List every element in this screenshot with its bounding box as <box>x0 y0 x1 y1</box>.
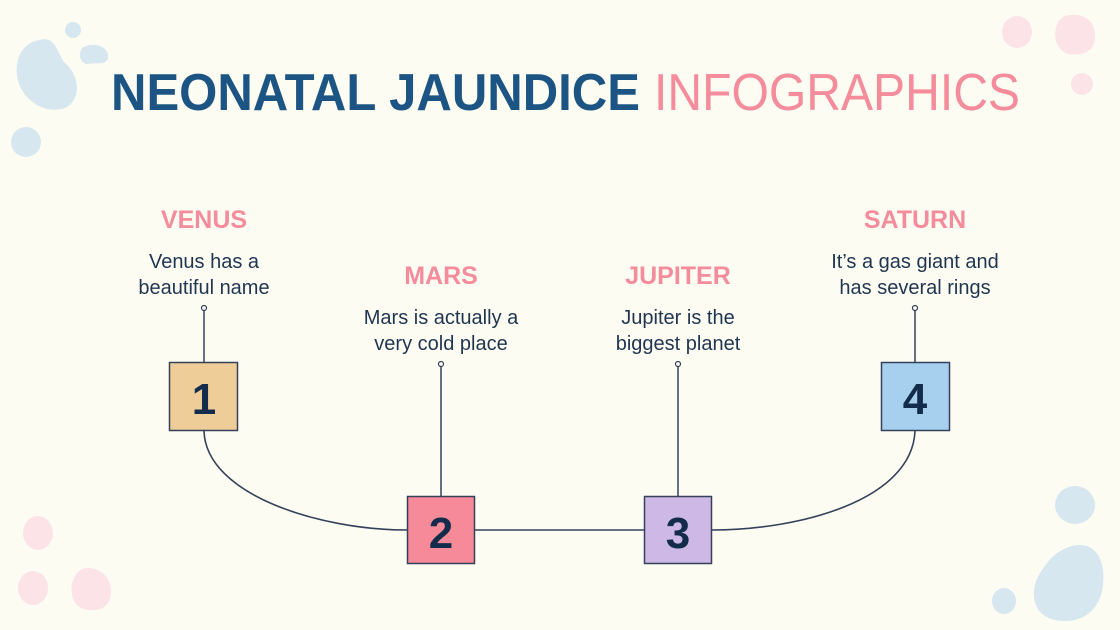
title: NEONATAL JAUNDICE <box>111 64 640 122</box>
step 4: Saturn: It’s a gas giant and <box>831 251 999 273</box>
step 2: Mars: very cold place <box>374 333 508 355</box>
step 4: Saturn: 4 <box>903 375 928 424</box>
title: INFOGRAPHICS <box>654 64 1020 122</box>
step 3: Jupiter: JUPITER <box>625 262 731 290</box>
step 1: Venus: beautiful name <box>138 277 270 299</box>
connector curve <box>204 431 915 530</box>
step 1: Venus: 1 <box>192 375 216 424</box>
step 2: Mars: Mars is actually a <box>364 307 519 329</box>
step 1: Venus <box>138 206 270 430</box>
step 3: Jupiter: 3 <box>666 509 690 558</box>
step 2: Mars: MARS <box>404 262 478 290</box>
decoration: blue blobs top-left <box>11 22 108 157</box>
step 2: Mars <box>364 262 519 564</box>
step 4: Saturn <box>831 206 999 430</box>
step 2: Mars: 2 <box>429 509 453 558</box>
decoration: pink blobs top-right <box>1002 15 1095 95</box>
decoration: blue blobs bottom-right <box>992 486 1103 621</box>
step 4: Saturn: has several rings <box>839 277 991 299</box>
decoration: pink blobs bottom-left <box>18 516 111 610</box>
step 1: Venus: Venus has a <box>149 251 260 273</box>
step 1: Venus: VENUS <box>161 206 247 234</box>
step 4: Saturn: SATURN <box>864 206 966 234</box>
step 3: Jupiter: Jupiter is the <box>621 307 735 329</box>
step 3: Jupiter <box>616 262 741 564</box>
step 3: Jupiter: biggest planet <box>616 333 741 355</box>
